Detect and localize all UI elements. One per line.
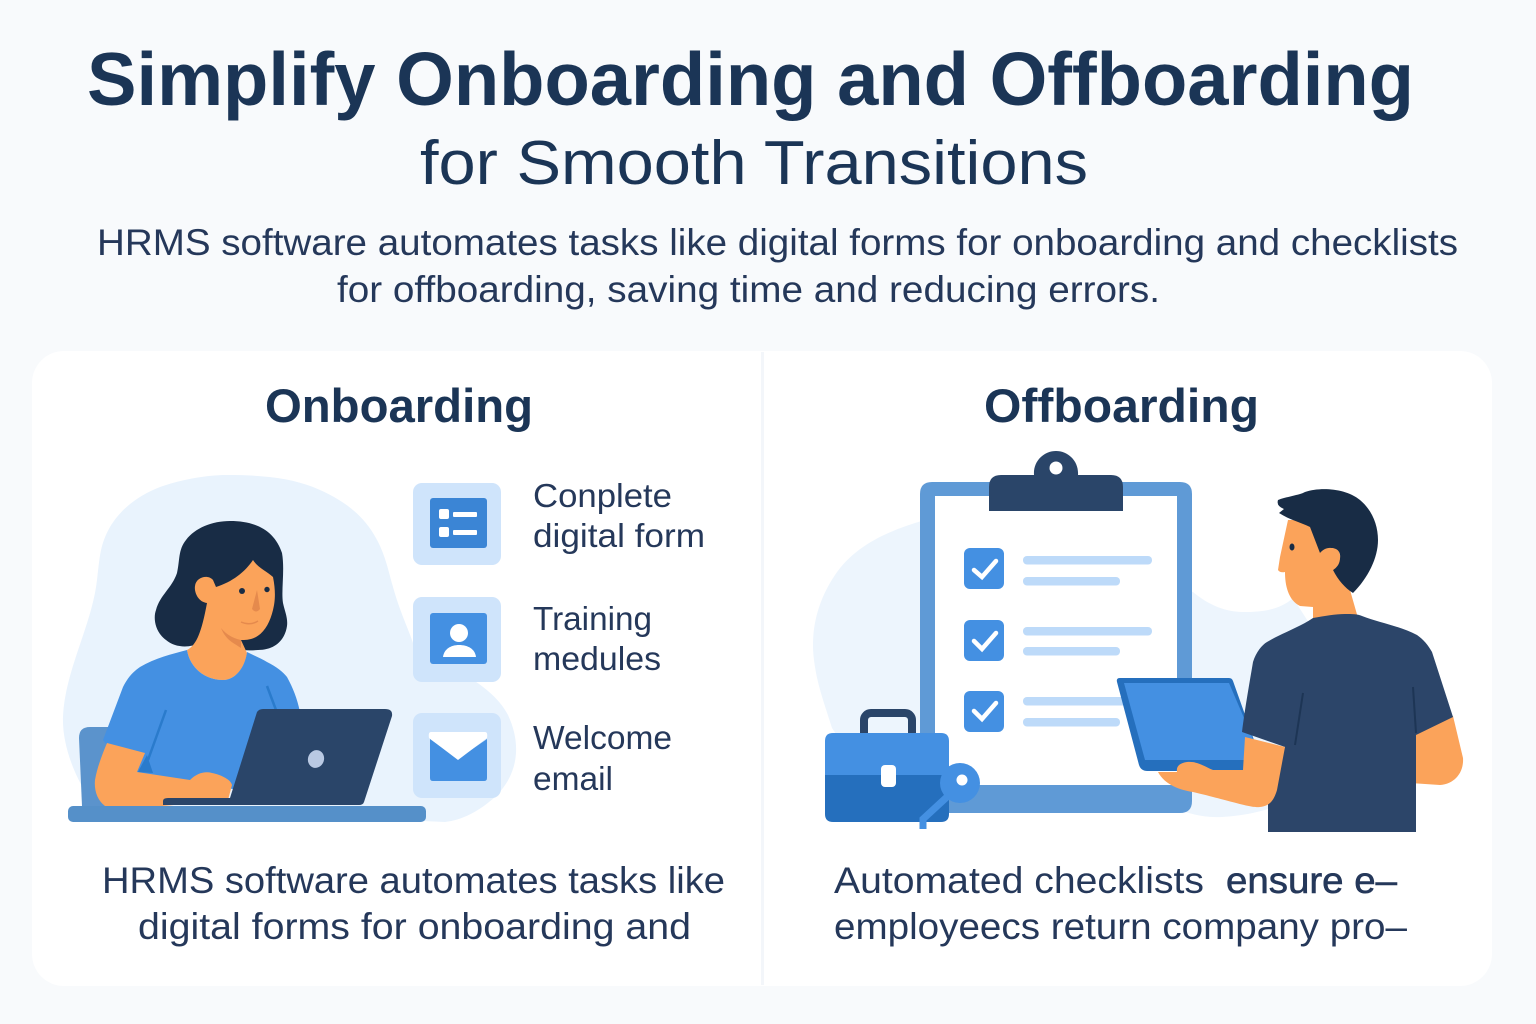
- intro paragraph: for offboarding, saving time and reducing errors.: [337, 269, 1160, 310]
- onboarding description: digital forms for onboarding and: [138, 906, 691, 947]
- shirt: [1242, 614, 1453, 832]
- hair: [155, 521, 287, 650]
- checklist row 3: [964, 691, 1152, 732]
- card: two-panel container: [32, 351, 1492, 986]
- label: training modules: medules: [533, 640, 661, 677]
- laptop: [163, 709, 392, 805]
- icon: welcome email: [413, 713, 501, 798]
- icon: briefcase: [825, 713, 949, 822]
- onboarding description: HRMS software automates tasks like: [102, 860, 725, 901]
- header: [87, 37, 1458, 310]
- ear: [1320, 548, 1340, 570]
- desk: [68, 806, 426, 822]
- shirt: [103, 650, 300, 790]
- illustration: woman at laptop: [68, 521, 426, 822]
- clipboard board: [920, 482, 1192, 813]
- left arm and hand: [1158, 737, 1285, 807]
- tablet: [1117, 678, 1265, 771]
- arm and hand: [95, 743, 232, 806]
- label: welcome email: Welcome: [533, 719, 672, 756]
- heading: onboarding: Onboarding: [265, 379, 533, 432]
- icon: key: [923, 763, 980, 829]
- shirt creases: [148, 686, 276, 760]
- background blob: [63, 475, 516, 822]
- background blob: [813, 520, 1320, 817]
- panel: onboarding: [63, 379, 725, 947]
- panel: offboarding: [813, 379, 1463, 947]
- neck and face: [1278, 520, 1360, 625]
- clipboard clip: [989, 451, 1123, 511]
- illustration: clipboard checklist: [920, 451, 1192, 813]
- illustration: man holding tablet: [1117, 489, 1463, 832]
- offboarding description: [834, 860, 1407, 947]
- offboarding description: Automated checklists: [834, 860, 1204, 901]
- heading: offboarding: Offboarding: [984, 379, 1259, 432]
- right arm: [1410, 716, 1463, 785]
- icon: digital form: [413, 483, 501, 565]
- face details: [221, 628, 241, 648]
- sleeve creases: [1295, 687, 1416, 745]
- label: complete digital form: [533, 477, 705, 554]
- chair: [79, 727, 112, 806]
- checklist row 1: [964, 548, 1152, 589]
- label: welcome email: [533, 719, 672, 797]
- onboarding description: [102, 860, 725, 947]
- label: complete digital form: digital form: [533, 517, 705, 554]
- label: complete digital form: Conplete: [533, 477, 672, 514]
- intro paragraph: [97, 222, 1458, 310]
- icon: training profile: [413, 597, 501, 682]
- offboarding description: employeecs return company pro–: [834, 906, 1407, 947]
- intro paragraph: HRMS software automates tasks like digital forms for onboarding and checklists: [97, 222, 1458, 263]
- eye: [1290, 544, 1294, 550]
- hair: [1278, 489, 1378, 593]
- subtitle: for Smooth Transitions: [420, 129, 1088, 198]
- label: welcome email: email: [533, 760, 613, 797]
- label: training modules: [533, 600, 661, 677]
- offboarding description: ensure e–: [1226, 860, 1397, 901]
- title: Simplify Onboarding and Offboarding: [87, 37, 1414, 121]
- label: training modules: Training: [533, 600, 652, 637]
- neck and face: [187, 560, 275, 680]
- laptop logo: [305, 748, 327, 770]
- checklist row 2: [964, 620, 1152, 661]
